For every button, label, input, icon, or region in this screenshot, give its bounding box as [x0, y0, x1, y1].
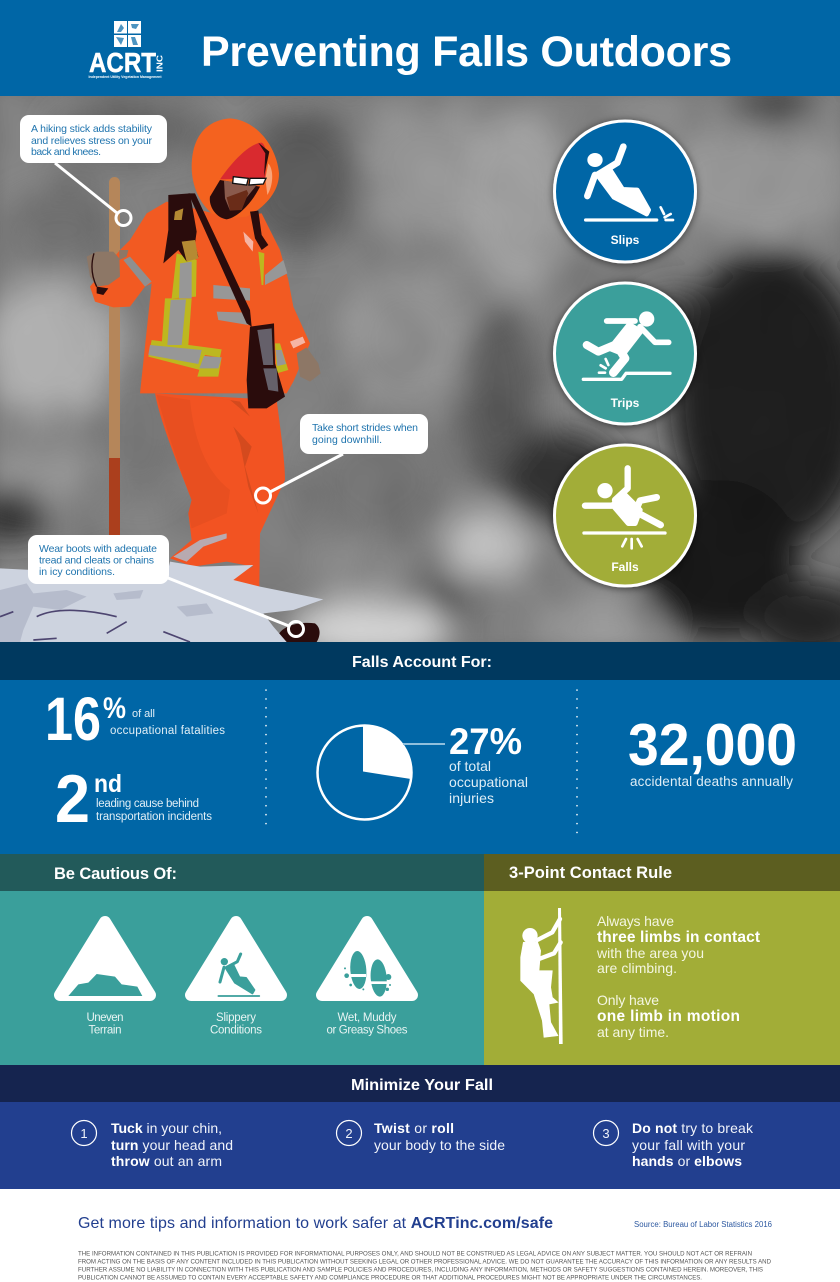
icon: slippery conditions: [191, 922, 281, 996]
label: wet muddy shoes: Wet, Muddy: [338, 1012, 397, 1024]
label: uneven terrain: Terrain: [88, 1024, 122, 1036]
heading: 3-point contact rule: 3-Point Contact Rule: [509, 864, 672, 882]
label: slippery conditions: [210, 1012, 262, 1036]
step 2: your body to the side: [374, 1137, 505, 1153]
pie chart: 27 percent: [318, 725, 445, 820]
callout: boots: tread and cleats or chains: [39, 554, 154, 566]
stat: 2nd: 2: [55, 761, 90, 837]
label: uneven terrain: [86, 1012, 124, 1036]
text: three limbs rule: one limb in motion: [597, 1008, 740, 1025]
callout: boots: Wear boots with adequate: [39, 543, 157, 555]
callout: boots: [28, 535, 304, 636]
callout: hiking stick: A hiking stick adds stability: [31, 123, 153, 135]
text: three limbs rule: Always have: [597, 913, 674, 929]
step 1: Tuck in your chin,: [111, 1120, 222, 1136]
panel: 3-point contact rule: [484, 854, 840, 1065]
text: three limbs rule: at any time.: [597, 1024, 669, 1040]
callout: short strides: going downhill.: [312, 434, 382, 446]
title: Preventing Falls Outdoors: [201, 28, 732, 76]
step 2: 2: [345, 1126, 353, 1141]
icon: trips: [554, 283, 696, 424]
trousers: [155, 393, 285, 587]
disclaimer: [78, 1252, 772, 1282]
jacket and hood: [87, 118, 321, 408]
stat: 16 percent: occupational fatalities: [110, 725, 225, 737]
header band: [0, 0, 840, 96]
icon: climber on pole: [521, 908, 563, 1044]
stat: 27 percent: [449, 721, 528, 806]
logo: ACRT: ACRT: [89, 47, 156, 78]
panel: falls account for: [0, 642, 840, 854]
stat: 32,000: 32,000: [628, 712, 797, 778]
disclaimer: FROM ACTING ON THE BASIS OF ANY CONTENT INCLUDED IN THIS PUBLICATION WITHOUT SEEKING LEGAL OR OTHER PROFESSIONAL ADVICE. WE DO NOT GUARANTEE THE ACCURACY OF THIS INFORMATION OR ANY RESULTS AND: [78, 1260, 772, 1266]
panel: hero photo background: [0, 88, 840, 662]
disclaimer: PUBLICATION CANNOT BE ASSUMED TO CONTAIN EVERY ACCEPTABLE SAFETY AND COMPLIANCE PROCEDURE OR THAT ADDITIONAL PROCEDURES MIGHT NOT BE APPROPRIATE UNDER THE CIRCUMSTANCES.: [78, 1276, 702, 1282]
callout: short strides: [256, 414, 428, 503]
stat: 16 percent: %: [103, 692, 126, 725]
icon: falls: [554, 445, 696, 586]
icon: uneven terrain: [60, 922, 150, 996]
stat: 16 percent: 16: [45, 685, 101, 753]
text: three limbs rule: with the area you: [596, 945, 704, 961]
stat: 27 percent: 27%: [449, 721, 522, 762]
disclaimer: THE INFORMATION CONTAINED IN THIS PUBLICATION IS PROVIDED FOR INFORMATIONAL PURPOSES ONLY, AND SHOULD NOT BE CONSTRUED AS LEGAL ADVICE ON ANY SUBJECT MATTER. YOU SHOULD NOT ACT OR REFRAIN: [78, 1252, 752, 1258]
logo: ACRT: Independent Utility Vegetation Management: [88, 75, 162, 79]
callout: boots: in icy conditions.: [39, 566, 115, 578]
panel: be cautious of: [0, 854, 484, 1065]
heading: falls account for: Falls Account For:: [352, 654, 492, 671]
icon: slips: [554, 121, 696, 262]
stat: 2nd: leading cause behind: [96, 798, 199, 810]
illustration: worker in orange rain gear: [0, 118, 323, 642]
step 3: [594, 1120, 754, 1169]
label: uneven terrain: Uneven: [86, 1012, 124, 1024]
step 3: Do not try to break: [632, 1120, 754, 1136]
text: three limbs rule: are climbing.: [597, 960, 677, 976]
disclaimer: FURTHER ASSUME NO LIABILITY IN CONNECTION WITH THIS PUBLICATION AND SAMPLE POLICIES AND PROCEDURES, INCLUDING ANY INFORMATION, METHODS OR SAFETY SUGGESTIONS CONTAINED HEREIN. MOREOVER, THIS: [78, 1268, 763, 1274]
icon: falls: Falls: [611, 560, 639, 574]
stat: 2nd: transportation incidents: [96, 811, 212, 823]
footer call to action: Get more tips and information to work safer at ACRTinc.com/safe: [78, 1215, 553, 1232]
step 3: 3: [602, 1126, 610, 1141]
callout: hiking stick: back and knees.: [31, 146, 101, 158]
step 2: [336, 1120, 505, 1153]
heading: minimize your fall: Minimize Your Fall: [351, 1077, 493, 1094]
source note: Source: Bureau of Labor Statistics 2016: [634, 1220, 772, 1229]
stat: 2nd: nd: [94, 770, 122, 798]
label: wet muddy shoes: or Greasy Shoes: [326, 1024, 408, 1036]
step 3: your fall with your: [632, 1137, 745, 1153]
logo: ACRT: [88, 21, 164, 79]
label: wet muddy shoes: [326, 1012, 408, 1036]
label: slippery conditions: Slippery: [216, 1012, 256, 1024]
callout: hiking stick: and relieves stress on your: [31, 135, 152, 147]
stat: 32,000: accidental deaths annually: [630, 774, 793, 789]
stat: 2nd: [55, 761, 212, 837]
icon: slips: Slips: [611, 233, 640, 247]
step 1: turn your head and: [111, 1137, 233, 1153]
panel: minimize your fall: [0, 1065, 840, 1189]
text: three limbs rule: three limbs in contact: [597, 929, 760, 946]
stat: 16 percent: of all: [132, 708, 155, 720]
callout: hiking stick: [20, 115, 167, 226]
step 3: hands or elbows: [632, 1153, 742, 1169]
snow-covered log: [0, 533, 323, 642]
stat: 27 percent: injuries: [449, 790, 494, 806]
label: slippery conditions: Conditions: [210, 1024, 262, 1036]
icon: wet muddy shoes: [322, 922, 412, 997]
step 2: Twist or roll: [374, 1120, 454, 1136]
text: three limbs rule: [596, 913, 760, 1040]
stat: 27 percent: of total: [449, 758, 491, 774]
text: three limbs rule: Only have: [597, 992, 659, 1008]
heading: be cautious of: Be Cautious Of:: [54, 865, 177, 883]
step 1: throw out an arm: [111, 1153, 222, 1169]
logo: ACRT: INC: [156, 55, 164, 72]
callout: short strides: Take short strides when: [312, 422, 418, 434]
stat: 16 percent: [45, 685, 225, 753]
icon: trips: Trips: [611, 396, 640, 410]
hiking stick: [109, 177, 120, 540]
step 1: [72, 1120, 233, 1169]
stat: 27 percent: occupational: [449, 774, 528, 790]
step 1: 1: [80, 1126, 88, 1141]
